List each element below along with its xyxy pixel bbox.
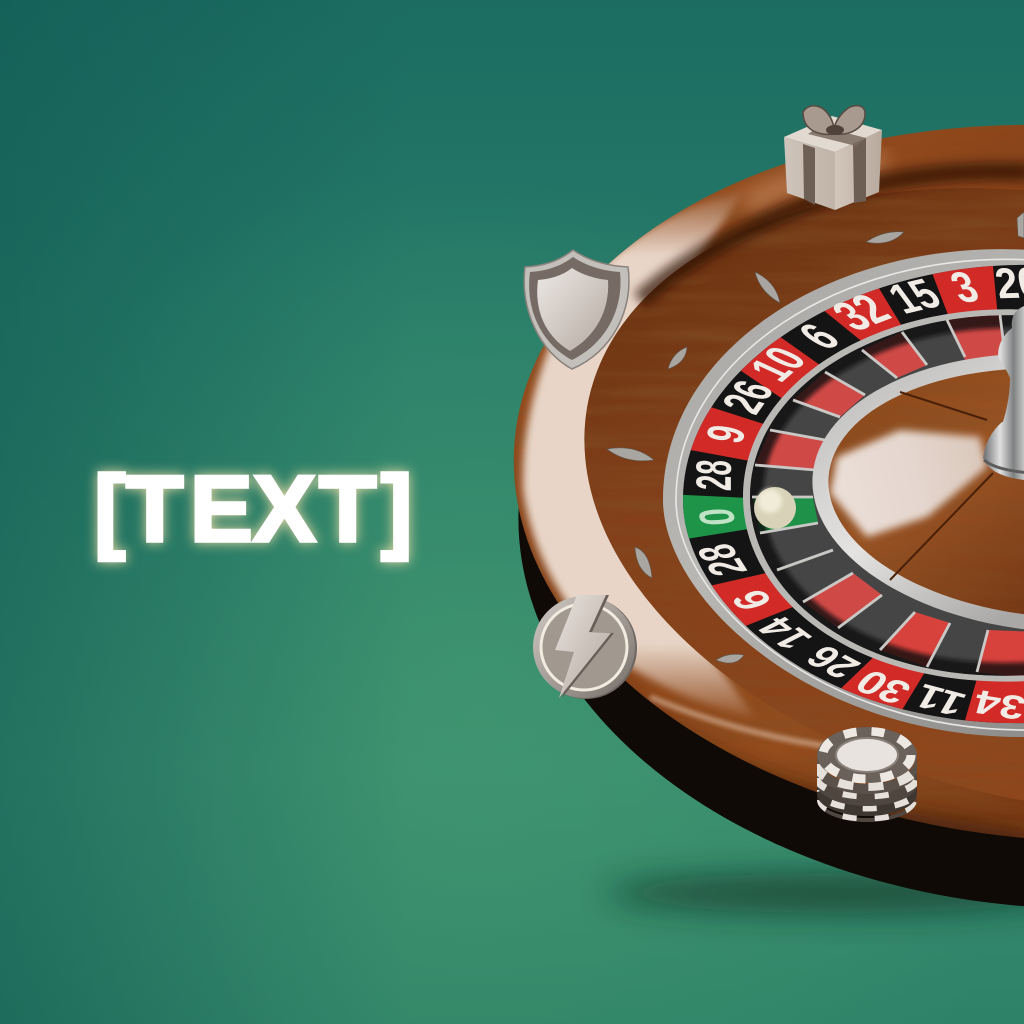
ivory ball bbox=[754, 487, 796, 529]
table shadow bbox=[605, 873, 1024, 913]
icon: lightning coin bbox=[533, 595, 637, 699]
band numbers: 15 bbox=[879, 270, 951, 323]
chip 2 bbox=[817, 770, 917, 806]
band numbers: 14 bbox=[748, 610, 823, 655]
band numbers: 28 bbox=[685, 458, 742, 492]
band numbers: 26 bbox=[797, 639, 870, 685]
band numbers: 0 bbox=[687, 507, 747, 527]
top chip bbox=[817, 727, 917, 794]
roulette wheel bbox=[499, 110, 1024, 936]
chip 3 bbox=[817, 784, 917, 816]
title placeholder text: [TEXT] bbox=[94, 456, 412, 561]
top rim shadow bbox=[640, 171, 1024, 300]
band numbers: 10 bbox=[738, 340, 819, 389]
band numbers: 11 bbox=[908, 677, 973, 722]
band colour segments bbox=[683, 266, 1024, 724]
wooden bowl bbox=[584, 188, 1024, 800]
cone seams bbox=[890, 392, 993, 580]
band numbers: 32 bbox=[820, 285, 902, 340]
inner metal ring bbox=[743, 309, 1024, 682]
bowl pins bbox=[607, 212, 1024, 663]
band numbers: 26 bbox=[711, 375, 787, 420]
icon: gift box bbox=[784, 106, 882, 210]
pocket dividers bbox=[752, 315, 1005, 672]
silver centre turret bbox=[983, 306, 1024, 480]
chip 4 bbox=[817, 796, 917, 824]
band numbers bbox=[664, 229, 1024, 729]
icon: chip stack bbox=[817, 727, 917, 824]
band numbers: 9 bbox=[695, 421, 757, 447]
icon: shield bbox=[524, 250, 629, 369]
number band bbox=[683, 265, 1024, 723]
cone reflection bbox=[830, 430, 987, 537]
band numbers: 3 bbox=[943, 263, 986, 313]
band numbers: 6 bbox=[786, 316, 852, 358]
wheel dark base bbox=[499, 132, 1024, 936]
wooden rim bbox=[500, 110, 1024, 870]
ball pockets bbox=[745, 310, 1024, 690]
wooden cone bbox=[828, 369, 1024, 614]
title placeholder text: [TEXT] bbox=[94, 456, 412, 561]
band numbers: 6 bbox=[720, 584, 784, 616]
cone silver ring bbox=[803, 337, 1024, 649]
betting track outer metal ring bbox=[663, 249, 1024, 737]
band numbers: 28 bbox=[686, 540, 759, 580]
band numbers: 30 bbox=[846, 663, 920, 712]
